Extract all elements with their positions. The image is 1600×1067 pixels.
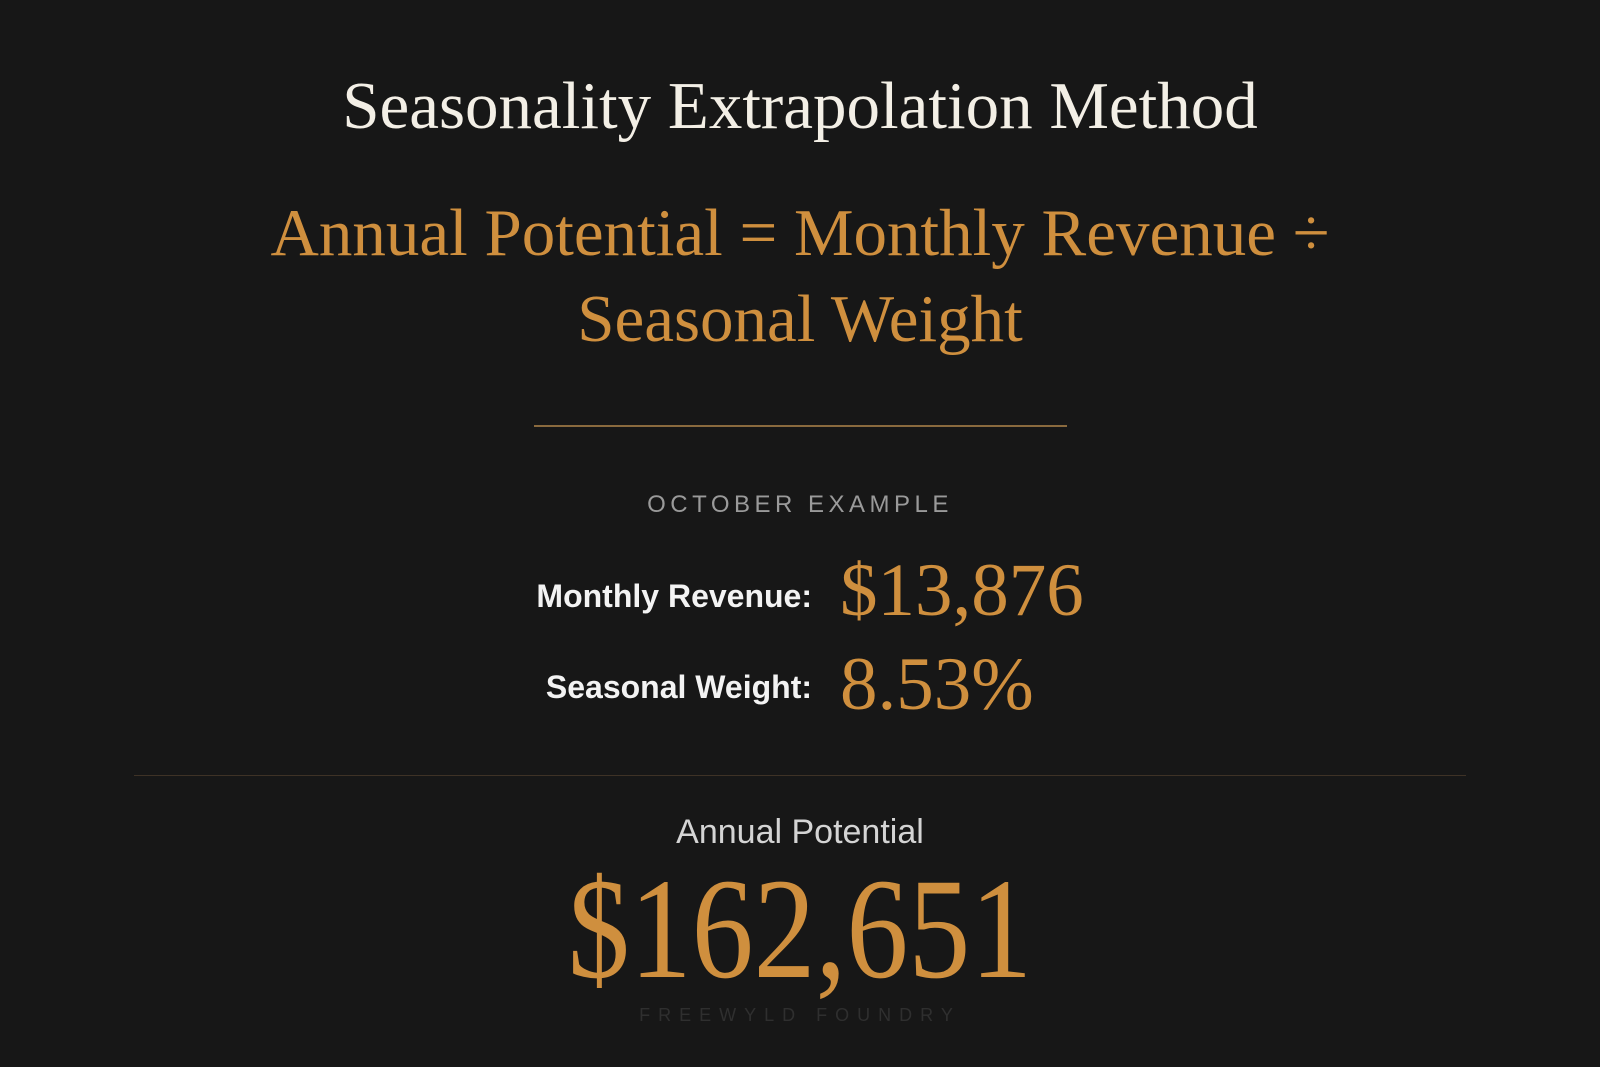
- result value: $162,651: [568, 850, 1032, 1009]
- divider: [134, 775, 1466, 776]
- result label: Annual Potential: [676, 813, 924, 851]
- formula: Annual Potential = Monthly Revenue ÷: [271, 196, 1329, 270]
- title: Seasonality Extrapolation Method: [342, 69, 1258, 143]
- row: seasonal weight: [546, 643, 1034, 726]
- formula: Seasonal Weight: [577, 282, 1023, 356]
- label: Monthly Revenue:: [536, 578, 812, 614]
- label: Seasonal Weight:: [546, 669, 812, 705]
- row: monthly revenue: [536, 549, 1084, 632]
- value: 8.53%: [840, 643, 1034, 726]
- divider: [534, 425, 1067, 427]
- value: $13,876: [840, 549, 1084, 632]
- footer: FREEWYLD FOUNDRY: [639, 1005, 961, 1025]
- formula: [271, 196, 1329, 356]
- section label: OCTOBER EXAMPLE: [647, 491, 953, 518]
